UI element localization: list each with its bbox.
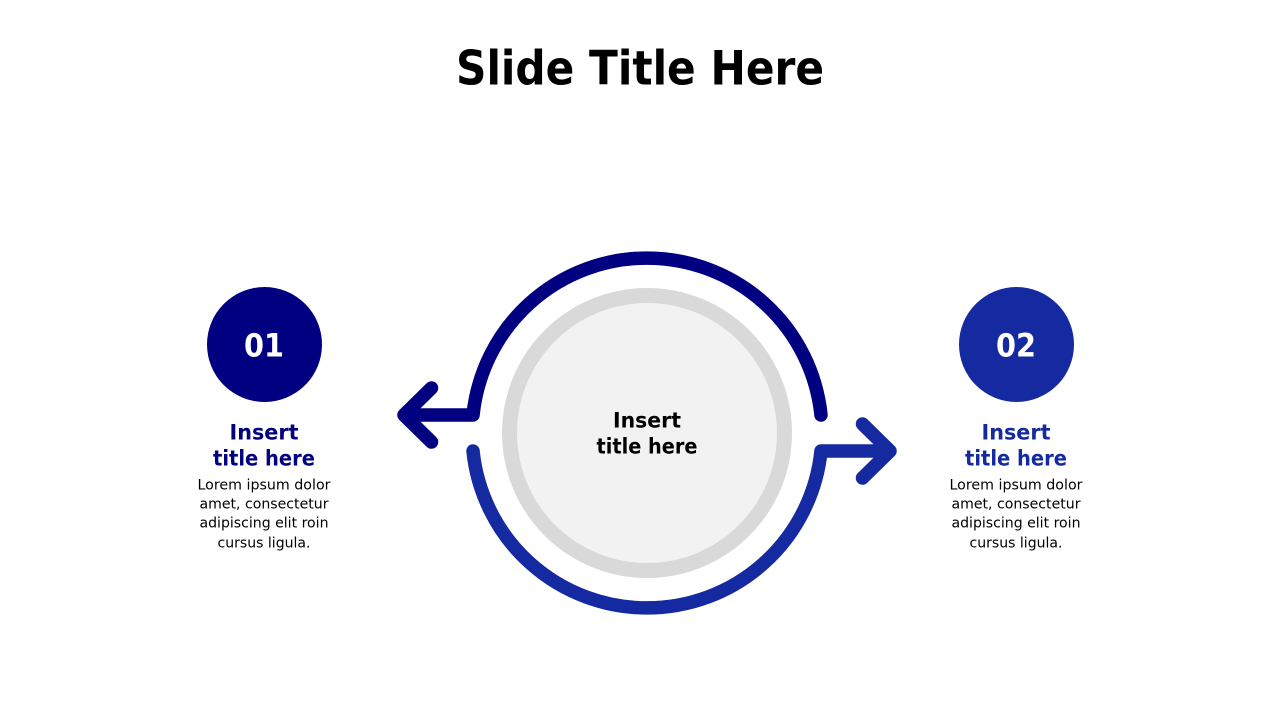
arrow: bottom arc pointing right — [473, 424, 890, 608]
number badge 01 — [207, 287, 322, 402]
heading 01 — [213, 420, 315, 470]
number badge 01: 01 — [244, 326, 284, 364]
central circle diagram — [404, 258, 890, 608]
panel: item 02 — [950, 287, 1083, 552]
text block 01: cursus ligula. — [218, 536, 310, 552]
text block 02: Lorem ipsum dolor — [950, 478, 1083, 494]
text block 02: adipiscing elit roin — [952, 516, 1080, 532]
number badge 02: 02 — [996, 326, 1036, 364]
text block 01: adipiscing elit roin — [200, 516, 328, 532]
panel: item 01 — [198, 287, 331, 552]
heading 01: Insert — [230, 420, 298, 444]
arrow: top arc pointing left — [404, 258, 821, 442]
number badge 02 — [959, 287, 1074, 402]
heading 01: title here — [213, 446, 315, 470]
title: Slide Title Here — [456, 42, 824, 96]
text block 01 — [198, 478, 331, 552]
heading 02 — [965, 420, 1067, 470]
center circle with title — [510, 296, 784, 570]
text block 02 — [950, 478, 1083, 552]
text block 01: amet, consectetur — [200, 496, 329, 512]
text block 01: Lorem ipsum dolor — [198, 478, 331, 494]
center circle with title: Insert — [613, 408, 681, 432]
heading 02: Insert — [982, 420, 1050, 444]
heading 02: title here — [965, 446, 1067, 470]
text block 02: amet, consectetur — [952, 496, 1081, 512]
center circle with title: title here — [596, 434, 698, 458]
text block 02: cursus ligula. — [970, 536, 1062, 552]
